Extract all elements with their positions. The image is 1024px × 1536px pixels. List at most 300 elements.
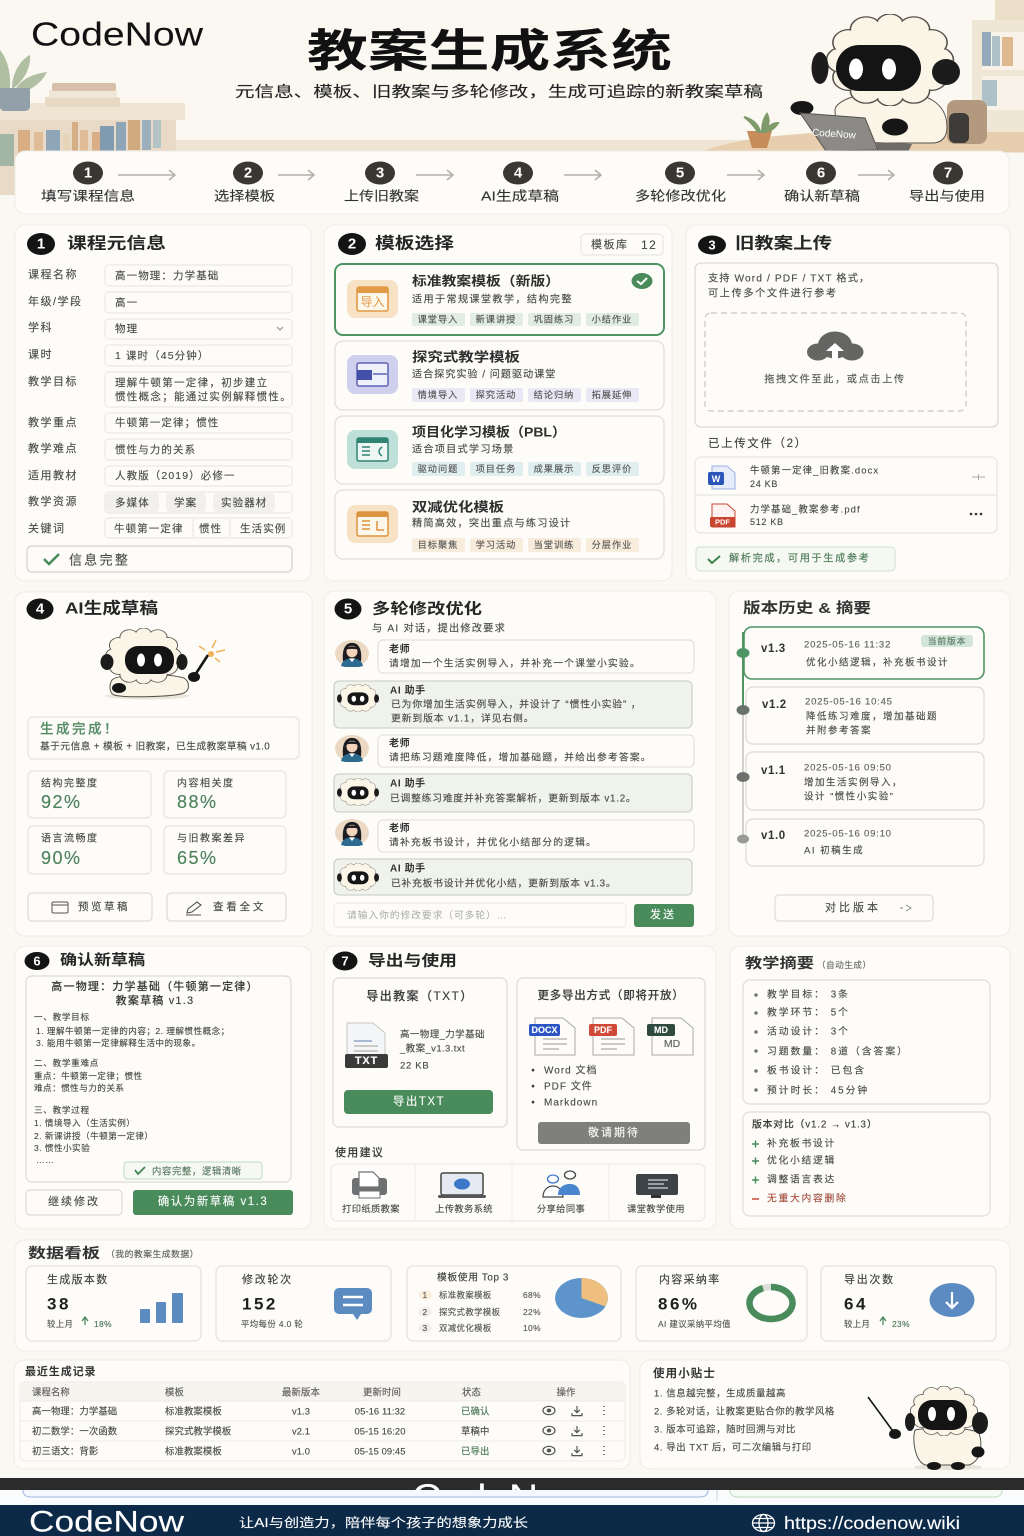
step 6: 确认新草稿	[784, 188, 860, 204]
template card: PBL: 成果展示	[534, 463, 574, 474]
table header: 更新时间	[363, 1386, 401, 1398]
message: AI 1: AI 助手	[390, 684, 426, 696]
form values: 高一物理：力学基础	[115, 269, 219, 282]
panel: course metadata	[15, 225, 311, 581]
template card: double reduction	[335, 490, 664, 559]
heading: 教学摘要	[745, 955, 814, 971]
metric: relevance	[164, 771, 286, 818]
form values: 惯性与力的关系	[115, 443, 196, 456]
step 2: 2	[244, 164, 252, 182]
version comparison	[743, 1112, 990, 1216]
heading: 确认新草稿	[60, 951, 145, 969]
lesson draft document: 1. 情境导入（生活实例）	[34, 1117, 135, 1128]
arrow	[727, 170, 764, 180]
step 2	[214, 162, 275, 204]
card: export count: 较上月	[844, 1319, 870, 1329]
card: top templates	[407, 1266, 621, 1341]
template card: standard: 标准教案模板（新版）	[412, 274, 560, 288]
table	[20, 1382, 625, 1461]
lesson draft document: 重点：牛顿第一定律；惯性	[34, 1070, 143, 1081]
table header: 模板	[165, 1386, 184, 1398]
icon: pdf	[710, 504, 735, 527]
table header: 操作	[557, 1386, 575, 1398]
step 7: 导出与使用	[909, 188, 985, 204]
panel: template selection	[324, 225, 672, 581]
row 2: 05-15 16:20	[354, 1426, 406, 1436]
template card: double reduction: 双减优化模板	[412, 500, 504, 514]
form values: 高一	[115, 296, 138, 309]
icon: markdown: MD	[664, 1038, 681, 1050]
message: teacher 3: 老师	[389, 822, 410, 834]
message: teacher 2: 老师	[389, 736, 410, 750]
card: versions generated: 较上月	[47, 1319, 73, 1329]
input box: 请输入你的修改要求（可多轮）…	[347, 908, 507, 922]
heading: 导出与使用	[368, 952, 457, 970]
template card: standard: 巩固练习	[534, 314, 574, 324]
version v1.0: 2025-05-16 09:10	[804, 828, 892, 840]
message: AI 3	[334, 859, 692, 895]
card: adoption rate: 内容采纳率	[659, 1272, 720, 1286]
card: top templates: 模板使用 Top 3	[437, 1270, 509, 1284]
arrow	[118, 170, 175, 180]
form values: 1 课时（45分钟）	[115, 349, 209, 362]
arrow	[858, 170, 894, 180]
card: top templates: 68%	[523, 1290, 541, 1300]
card: more export formats: 更多导出方式（即将开放）	[538, 988, 684, 1002]
step 1: 1	[84, 164, 92, 182]
row 1: 标准教案模板	[165, 1406, 222, 1416]
summary list: 活动设计： 3个	[767, 1024, 850, 1038]
number badge	[24, 952, 50, 970]
icon: classroom screen	[636, 1174, 678, 1198]
number badge	[698, 236, 726, 254]
card: top templates: 探究式教学模板	[439, 1307, 501, 1317]
form labels: 课程名称	[28, 267, 78, 281]
metric: fluency: 语言流畅度	[41, 832, 98, 844]
mascot with pointer	[868, 1386, 988, 1470]
button: full text: 查看全文	[213, 900, 266, 913]
resource chips: 多媒体	[115, 496, 150, 509]
form labels: 教学难点	[28, 441, 78, 455]
heading: 数据看板	[28, 1245, 100, 1261]
form labels: 教学目标	[28, 374, 78, 388]
card: revision rounds: 修改轮次	[242, 1272, 293, 1286]
lesson draft document: 3. 能用牛顿第一定律解释生活中的现象。	[36, 1037, 201, 1048]
uploaded files list	[695, 457, 997, 533]
card: top templates: 3	[422, 1323, 428, 1333]
panel: teaching summary	[730, 946, 1010, 1229]
card: adoption rate: 86%	[658, 1294, 700, 1314]
step 5	[635, 162, 726, 204]
card: adoption rate	[636, 1266, 807, 1341]
tips list: 1. 信息越完整，生成质量越高	[654, 1388, 786, 1398]
card: top templates: 2	[422, 1307, 428, 1317]
form values: 牛顿第一定律；惯性	[115, 416, 219, 429]
step 1	[41, 162, 135, 204]
row 3: v1.0	[292, 1446, 310, 1456]
number badge: 2	[348, 236, 356, 252]
form values: 惯性概念；能通过实例解释惯性。	[115, 390, 292, 403]
resource chips: 实验器材	[221, 496, 267, 509]
icon: globe	[752, 1514, 774, 1532]
usage suggestions: 打印纸质教案	[342, 1203, 400, 1214]
version v1.2: 2025-05-16 10:45	[805, 696, 893, 708]
row 2: 初二数学：一次函数	[32, 1426, 118, 1436]
process steps bar	[15, 151, 1009, 214]
step 4: 4	[514, 164, 523, 182]
heading: 多轮修改优化	[372, 600, 482, 618]
icon: txt file	[345, 1023, 388, 1068]
arrow	[564, 170, 601, 180]
icon: pdf: PDF	[715, 518, 730, 526]
template library count: 12	[641, 238, 657, 252]
generation result	[28, 717, 299, 759]
generation result: 生成完成！	[40, 720, 120, 736]
card: revision rounds: 平均每份 4.0 轮	[241, 1319, 303, 1329]
row 3: 已导出	[461, 1446, 489, 1456]
version v1.1	[736, 752, 984, 810]
heading: 课程元信息	[67, 234, 166, 252]
row 1: v1.3	[292, 1406, 310, 1416]
version v1.0: v1.0	[761, 830, 786, 842]
subtitle: 元信息、模板、旧教案与多轮修改，生成可追踪的新教案草稿	[235, 82, 763, 100]
card: export count	[821, 1266, 996, 1341]
metric: structure: 92%	[41, 792, 82, 812]
timeline	[742, 632, 744, 840]
card: versions generated	[26, 1266, 201, 1341]
lesson draft document: 3. 惯性小实验	[34, 1142, 90, 1153]
card: versions generated: 18%	[94, 1319, 112, 1329]
version comparison: 优化小结逻辑	[767, 1154, 836, 1166]
template card: double reduction: 目标聚焦	[418, 539, 458, 550]
card: export TXT: _教案_v1.3.txt	[399, 1042, 465, 1054]
usage suggestions: 上传教务系统	[435, 1203, 493, 1214]
form values: 理解牛顿第一定律，初步建立	[115, 376, 268, 389]
table header	[32, 1386, 575, 1398]
heading: 使用小贴士	[653, 1366, 716, 1380]
row 1: 05-16 11:32	[355, 1406, 405, 1416]
keyword chips: 惯性	[199, 522, 222, 535]
usage suggestions heading: 使用建议	[335, 1145, 384, 1159]
metric: fluency: 90%	[41, 848, 82, 868]
number badge	[338, 233, 366, 255]
form labels	[28, 267, 83, 535]
summary list: 板书设计： 已包含	[767, 1064, 866, 1076]
card: export TXT: 22 KB	[400, 1060, 429, 1072]
version v1.2: 降低练习难度，增加基础题	[806, 710, 938, 722]
card: top templates: 1	[422, 1290, 428, 1300]
template card: double reduction: 当堂训练	[534, 539, 574, 550]
button: confirm	[133, 1190, 293, 1215]
panel: usage tips	[640, 1360, 1010, 1470]
template card: standard: 小结作业	[592, 314, 632, 324]
header illustration: left shelf, plant and books	[0, 0, 1024, 195]
step 5: 5	[676, 164, 684, 182]
row 2: 草稿中	[461, 1426, 489, 1436]
form labels: 教学重点	[28, 415, 78, 429]
message: teacher 1: 老师	[389, 642, 410, 656]
version v1.3: 2025-05-16 11:32	[804, 640, 891, 650]
message: teacher 1: 请增加一个生活实例导入，并补充一个课堂小实验。	[389, 656, 641, 670]
template card: standard	[335, 264, 664, 335]
version v1.2: 并附参考答案	[806, 724, 872, 736]
row 3	[32, 1446, 604, 1456]
card: more export formats: •	[531, 1066, 535, 1076]
badge: content complete: 内容完整，逻辑清晰	[152, 1166, 242, 1176]
message: teacher 2: 请把练习题难度降低，增加基础题，并给出参考答案。	[389, 750, 652, 764]
form labels: 课时	[28, 348, 53, 361]
upload box	[695, 263, 998, 427]
footer remnants: dark bar with clipped logo	[0, 1476, 1024, 1518]
summary list: 预计时长： 45分钟	[767, 1084, 869, 1096]
button: full text	[167, 893, 286, 921]
number badge: 4	[36, 600, 45, 618]
form values: 人教版（2019）必修一	[115, 469, 236, 482]
icon: pdf	[589, 1018, 634, 1055]
heading note: （自动生成）	[817, 960, 872, 970]
status: info complete	[27, 546, 292, 572]
icon: word	[708, 466, 735, 489]
form labels: 学科	[28, 320, 53, 334]
number badge: 6	[33, 954, 41, 968]
lesson draft document: 教案草稿 v1.3	[116, 993, 194, 1007]
message: AI 3: 已补充板书设计并优化小结，更新到版本 v1.3。	[391, 876, 616, 890]
message: AI 1: 已为你增加生活实例导入，并设计了 “惯性小实验” ，	[391, 698, 641, 710]
panel: multi-round revision	[324, 591, 716, 936]
number badge: 5	[344, 600, 352, 618]
metric: difference: 与旧教案差异	[177, 832, 246, 844]
tips list: 4. 导出 TXT 后，可二次编辑与打印	[654, 1442, 812, 1452]
form labels: 教学资源	[28, 494, 78, 508]
lesson draft document: ……	[36, 1155, 55, 1165]
version v1.0: AI 初稿生成	[804, 844, 864, 856]
send button	[634, 904, 694, 927]
step 1: 填写课程信息	[41, 188, 135, 204]
panel: data dashboard	[15, 1240, 1010, 1351]
row 3: 初三语文：背影	[32, 1446, 98, 1456]
panel: recent records	[14, 1360, 630, 1469]
button: compare versions: 对比版本	[825, 900, 881, 914]
footer brand bar	[0, 1505, 1024, 1536]
card: more export formats: Word 文档	[544, 1064, 598, 1076]
lesson draft document: 一、教学目标	[34, 1011, 90, 1022]
template card: inquiry: 拓展延伸	[592, 389, 632, 400]
step 6: 6	[817, 164, 825, 182]
version v1.3	[736, 627, 984, 679]
footer url: https://codenow.wiki	[784, 1513, 960, 1533]
template card: PBL: 反思评价	[592, 464, 632, 474]
usage suggestions: 课堂教学使用	[627, 1203, 685, 1214]
form values	[115, 269, 292, 482]
message: AI 1: 更新到版本 v1.1，详见右侧。	[391, 712, 534, 724]
version comparison: 补充板书设计	[767, 1136, 836, 1150]
template card: inquiry	[335, 341, 664, 410]
summary list: 习题数量： 8道（含答案）	[767, 1044, 909, 1058]
card: export TXT: 导出TXT	[393, 1094, 445, 1108]
template card: standard: 适用于常规课堂教学，结构完整	[412, 292, 573, 306]
template library count	[581, 234, 663, 255]
icon: word: W	[712, 474, 721, 484]
template card: PBL: 适合项目式学习场景	[412, 442, 514, 456]
message: teacher 2	[335, 735, 694, 767]
upload box: 支持 Word / PDF / TXT 格式，	[708, 272, 870, 284]
uploaded files list: 牛顿第一定律_旧教案.docx	[750, 464, 879, 476]
template card: double reduction: 学习活动	[476, 539, 516, 550]
table header: 最新版本	[282, 1386, 320, 1398]
lesson draft document: 1. 理解牛顿第一定律的内容；2. 理解惯性概念；	[36, 1025, 230, 1036]
tips list: 3. 版本可追踪，随时回溯与对比	[654, 1424, 796, 1434]
card: versions generated: 38	[47, 1294, 71, 1314]
version v1.0	[737, 819, 984, 866]
icon: printer	[352, 1172, 387, 1198]
template card: PBL: 项目化学习模板（PBL）	[412, 424, 566, 440]
card: top templates: 10%	[523, 1323, 541, 1333]
lesson draft document	[26, 976, 291, 1182]
arrow	[416, 170, 453, 180]
form fields	[105, 265, 292, 538]
row 1: 高一物理：力学基础	[32, 1406, 117, 1416]
version v1.1: 增加生活实例导入，	[804, 776, 903, 788]
card: more export formats: Markdown	[544, 1098, 598, 1108]
step 3: 3	[376, 164, 384, 182]
summary list: 教学目标： 3条	[767, 988, 850, 1000]
footer remnants: dark bar with clipped logo: CodeNow	[412, 1476, 591, 1518]
message: AI 2: 已调整练习难度并补充答案解析，更新到版本 v1.2。	[390, 792, 636, 804]
panel: AI draft generation	[15, 592, 312, 936]
message: AI 1	[334, 681, 692, 728]
metric: fluency	[28, 826, 151, 874]
version comparison: 调整语言表达	[767, 1172, 836, 1186]
row 3: 标准教案模板	[165, 1446, 222, 1456]
version v1.3: 优化小结逻辑，补充板书设计	[806, 656, 949, 668]
uploaded files list: 24 KB	[750, 479, 778, 489]
card: export count: 导出次数	[844, 1272, 895, 1286]
table header: 课程名称	[32, 1386, 70, 1398]
card: revision rounds	[216, 1266, 391, 1341]
card: adoption rate: AI 建议采纳平均值	[658, 1319, 731, 1329]
template card: inquiry: 探究式教学模板	[412, 350, 520, 364]
version v1.1: 2025-05-16 09:50	[804, 762, 892, 774]
step 6	[784, 162, 860, 204]
icon: laptop	[438, 1173, 486, 1198]
number badge: 7	[341, 954, 349, 968]
message: teacher 1	[335, 640, 694, 673]
number badge: 1	[37, 236, 45, 252]
version comparison: 版本对比（v1.2 → v1.3）	[752, 1118, 878, 1130]
template card: PBL: 驱动问题	[418, 463, 458, 474]
button: preview	[28, 893, 152, 921]
resource chips	[106, 493, 275, 512]
number badge	[332, 952, 358, 970]
icon: people sharing	[543, 1171, 580, 1197]
message: AI 2: AI 助手	[390, 776, 426, 790]
keyword chips: 牛顿第一定律	[114, 522, 184, 535]
panel: confirm draft	[15, 946, 311, 1229]
uploaded files heading: 已上传文件（2）	[708, 436, 808, 450]
card: more export formats: PDF 文件	[544, 1080, 593, 1092]
step 7: 7	[944, 164, 952, 182]
message: AI 3: AI 助手	[390, 862, 426, 874]
row 1: 已确认	[461, 1406, 490, 1416]
metric: structure: 结构完整度	[41, 776, 98, 790]
logo: CodeNow	[31, 16, 203, 52]
template card: standard: 导入	[360, 295, 385, 309]
icon: markdown: MD	[654, 1025, 668, 1035]
form values: 物理	[115, 322, 138, 335]
status: parsed: 解析完成，可用于生成参考	[729, 552, 870, 564]
button: compare versions	[775, 895, 933, 921]
template card: inquiry: 情境导入	[418, 389, 458, 400]
upload box: 可上传多个文件进行参考	[708, 286, 838, 300]
mascot: sheep at laptop: CodeNow	[812, 128, 857, 142]
panel: version history	[729, 591, 1010, 936]
card: top templates: 22%	[523, 1307, 541, 1317]
keyword chips	[114, 519, 286, 537]
metric: structure	[28, 771, 151, 818]
card: top templates: 双减优化模板	[439, 1323, 492, 1333]
table header: 状态	[462, 1386, 481, 1398]
metric: difference: 65%	[177, 848, 218, 868]
input box	[334, 903, 626, 927]
card: export TXT: 高一物理_力学基础	[400, 1028, 485, 1040]
heading: AI生成草稿	[65, 598, 158, 618]
lesson draft document: 高一物理：力学基础（牛顿第一定律）	[51, 979, 259, 993]
panel: legacy upload	[686, 225, 1010, 581]
upload box: 拖拽文件至此，或点击上传	[764, 372, 906, 386]
lesson draft document: 难点：惯性与力的关系	[34, 1082, 124, 1093]
card: revision rounds: 152	[242, 1294, 278, 1314]
step 3: 上传旧教案	[344, 188, 419, 204]
heading: 版本历史 & 摘要	[743, 599, 871, 617]
footer slogan: 让AI与创造力，陪伴每个孩子的想象力成长	[239, 1515, 529, 1530]
icon: upload cloud	[807, 332, 864, 361]
template card: double reduction: 精简高效，突出重点与练习设计	[412, 516, 571, 530]
form labels: 年级/学段	[28, 294, 83, 308]
card: export count: 64	[844, 1294, 868, 1314]
row 1	[32, 1406, 604, 1416]
number badge: 3	[708, 238, 716, 252]
step 4: AI生成草稿	[481, 188, 559, 204]
step 2: 选择模板	[214, 188, 275, 204]
keyword chips: 生活实例	[240, 522, 286, 535]
header illustration: right bookcase, table and plant	[700, 0, 1024, 152]
card: more export formats: •	[531, 1098, 535, 1108]
card: top templates: 标准教案模板	[439, 1290, 492, 1300]
title: 教案生成系统	[307, 26, 672, 76]
message: teacher 3	[335, 819, 694, 852]
icon: docx	[529, 1018, 575, 1055]
template card: double reduction: 分层作业	[592, 539, 632, 550]
row 2: v2.1	[292, 1426, 310, 1436]
card: more export formats: 敬请期待	[588, 1125, 640, 1139]
button: preview: 预览草稿	[78, 900, 130, 913]
step 3	[344, 162, 419, 204]
heading note: （我的教案生成数据）	[106, 1248, 199, 1259]
metric: difference	[164, 826, 286, 874]
template card: inquiry: 适合探究实验 / 问题驱动课堂	[412, 368, 556, 380]
generation result: 基于元信息 + 模板 + 旧教案，已生成教案草稿 v1.0	[40, 740, 270, 752]
card: export TXT	[333, 978, 507, 1127]
step 7	[909, 162, 985, 204]
heading: 最近生成记录	[25, 1364, 96, 1378]
template card: inquiry: 结论归纳	[534, 389, 574, 400]
number badge	[27, 233, 55, 255]
card: more export formats: •	[531, 1082, 535, 1092]
step 4	[481, 162, 559, 204]
metric: relevance: 内容相关度	[177, 776, 234, 790]
uploaded files list: 512 KB	[750, 517, 784, 527]
version v1.1: v1.1	[761, 765, 786, 777]
